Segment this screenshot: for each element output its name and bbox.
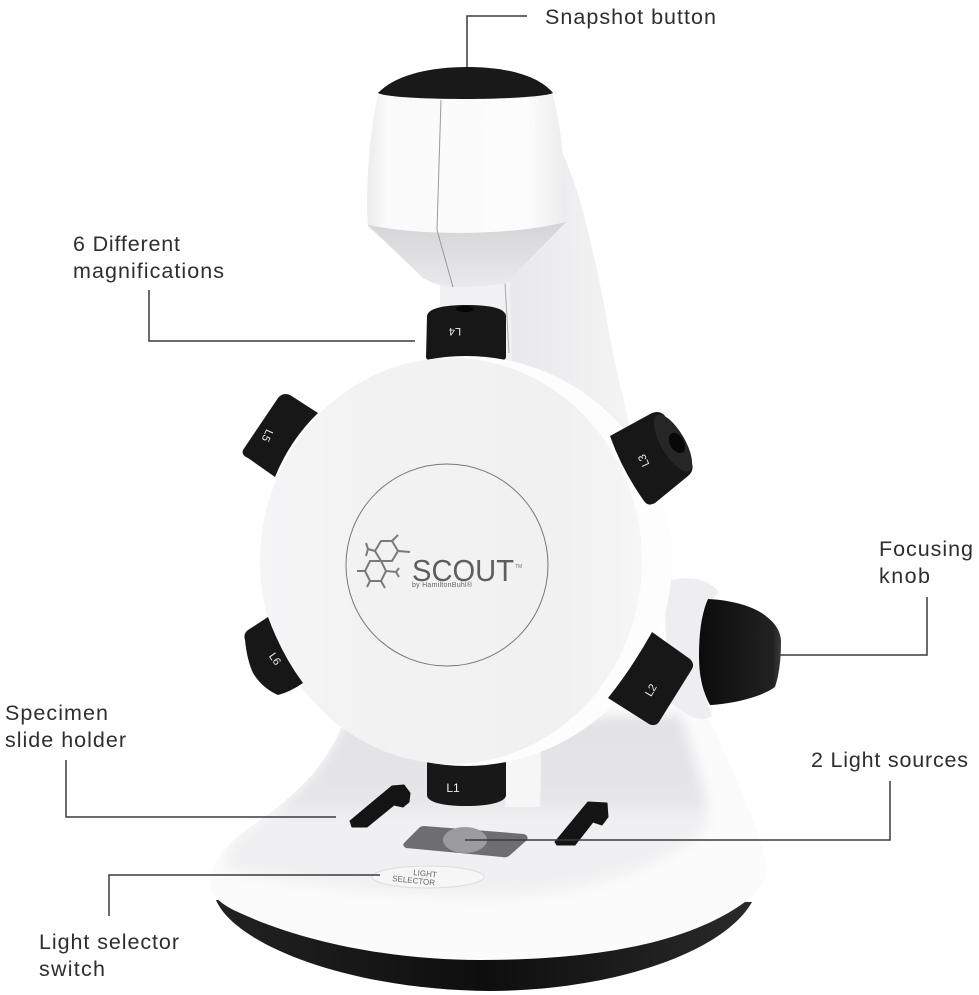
label: magnifications [73, 232, 415, 341]
slide clip left [350, 785, 410, 827]
head body [367, 95, 567, 287]
objective L1: L1 [446, 781, 460, 795]
turret disk face [260, 358, 642, 764]
focusing collar [664, 578, 719, 719]
turret disk rim [260, 356, 672, 766]
logo: SCOUT: TM [515, 564, 522, 570]
label: specimen slide holder: Specimen [5, 701, 108, 725]
objective L3: L3 [636, 452, 652, 468]
neck [440, 282, 512, 362]
base tray [226, 715, 707, 897]
label: focusing knob [778, 537, 973, 655]
label: specimen slide holder: slide holder [5, 728, 126, 752]
focusing knob [699, 599, 781, 705]
label: snapshot button [467, 5, 716, 67]
logo: SCOUT: SCOUT [412, 553, 514, 588]
base white body [210, 700, 766, 960]
inner circle [346, 464, 548, 666]
objective L4 [426, 305, 506, 365]
light selector switch [372, 866, 484, 888]
objective L3 [610, 409, 699, 505]
support arm [440, 140, 640, 800]
label: light sources: 2 Light sources [811, 748, 968, 772]
light source [443, 827, 487, 853]
microscope [210, 67, 781, 991]
head seam [437, 100, 453, 287]
base black underside [216, 900, 752, 991]
logo: SCOUT: by HamiltonBuhl® [412, 581, 473, 589]
label: light selector switch: switch [39, 957, 105, 981]
label: light selector switch [39, 875, 380, 981]
label: focusing knob: knob [879, 564, 930, 588]
glass stage plate [403, 826, 528, 857]
hexagon molecule mark [357, 535, 410, 588]
seam line [505, 283, 509, 353]
label: light sources [465, 748, 968, 840]
objective L4: L4 [449, 325, 461, 337]
logo: SCOUT [357, 535, 522, 589]
label: light selector switch: Light selector [39, 930, 179, 954]
label: specimen slide holder [5, 701, 336, 817]
light selector switch: LIGHT [413, 868, 437, 879]
objective L6: L6 [266, 651, 283, 668]
snapshot button dome [378, 67, 553, 99]
objective L2 [608, 632, 693, 725]
label: magnifications: magnifications [73, 259, 224, 283]
light selector switch: SELECTOR [392, 874, 436, 888]
slide clip right [555, 802, 608, 845]
label: focusing knob: Focusing [879, 537, 973, 561]
objective L6 [244, 617, 303, 695]
label: magnifications: 6 Different [73, 232, 180, 256]
support column [505, 745, 541, 807]
objective L5 [243, 394, 318, 477]
objective L1 [427, 755, 506, 806]
objective L5: L5 [259, 427, 275, 443]
label: snapshot button: Snapshot button [545, 5, 716, 29]
objective L2: L2 [643, 682, 660, 699]
head chamfer [368, 222, 566, 287]
